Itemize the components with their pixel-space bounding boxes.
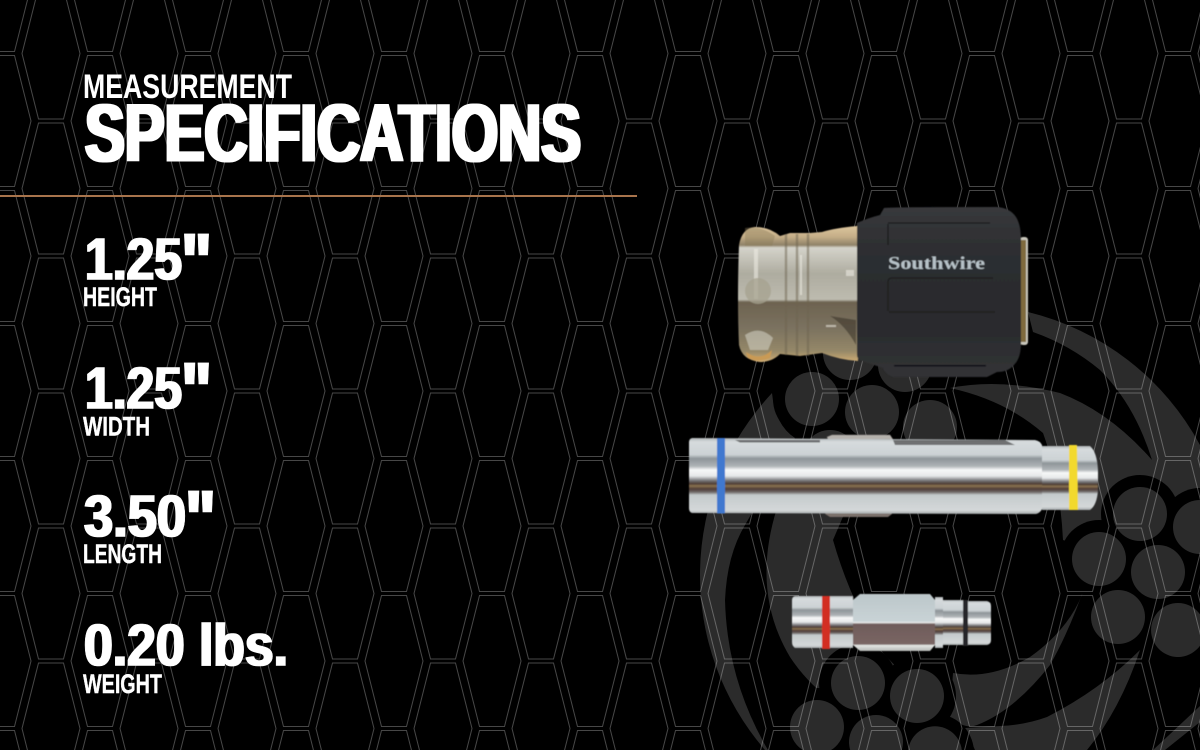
value: 0.20 lbs.: 0.20 lbs. <box>84 612 288 678</box>
spec: weight <box>83 612 288 699</box>
value: 3.50 inches: " <box>185 473 216 567</box>
yellow band <box>1069 445 1078 510</box>
black rubber grip <box>857 207 1021 377</box>
socket step <box>1042 446 1098 510</box>
brand name on grip: Southwire <box>888 253 985 273</box>
bit tip <box>968 601 991 645</box>
retaining tabs <box>825 435 894 517</box>
value: 1.25 inches: 1.25 <box>85 356 182 422</box>
value: 1.25 inches: " <box>181 345 212 439</box>
shadow streaks <box>735 440 1015 445</box>
spec: length <box>83 473 216 569</box>
label: width: WIDTH <box>83 412 150 442</box>
spec: width <box>83 345 212 442</box>
product: short chrome bit <box>792 594 991 651</box>
heading line: specifications: SPECIFICATIONS <box>85 88 581 179</box>
divider rule <box>0 195 637 197</box>
value: 1.25 inches: 1.25 <box>85 226 182 292</box>
neck <box>935 597 943 648</box>
heading line: measurement: MEASUREMENT <box>83 68 292 106</box>
clear handle section <box>738 226 858 362</box>
blue band <box>717 438 725 514</box>
value: 1.25 inches: " <box>181 216 212 310</box>
product: screwdriver handle <box>738 207 1028 377</box>
black o-ring <box>963 600 968 646</box>
label: height: HEIGHT <box>83 282 157 312</box>
hex section <box>853 594 935 651</box>
label: weight: WEIGHT <box>83 669 162 699</box>
product: long chrome socket <box>689 435 1098 517</box>
label: length: LENGTH <box>83 539 162 569</box>
background logo: wire bundle watermark <box>700 312 1200 750</box>
value: 3.50 inches: 3.50 <box>84 484 186 550</box>
red band <box>822 596 830 649</box>
socket body <box>689 438 1042 514</box>
heading <box>83 68 581 179</box>
spec: height <box>83 216 212 312</box>
bit shank <box>792 596 853 648</box>
rear cap <box>1020 237 1028 345</box>
